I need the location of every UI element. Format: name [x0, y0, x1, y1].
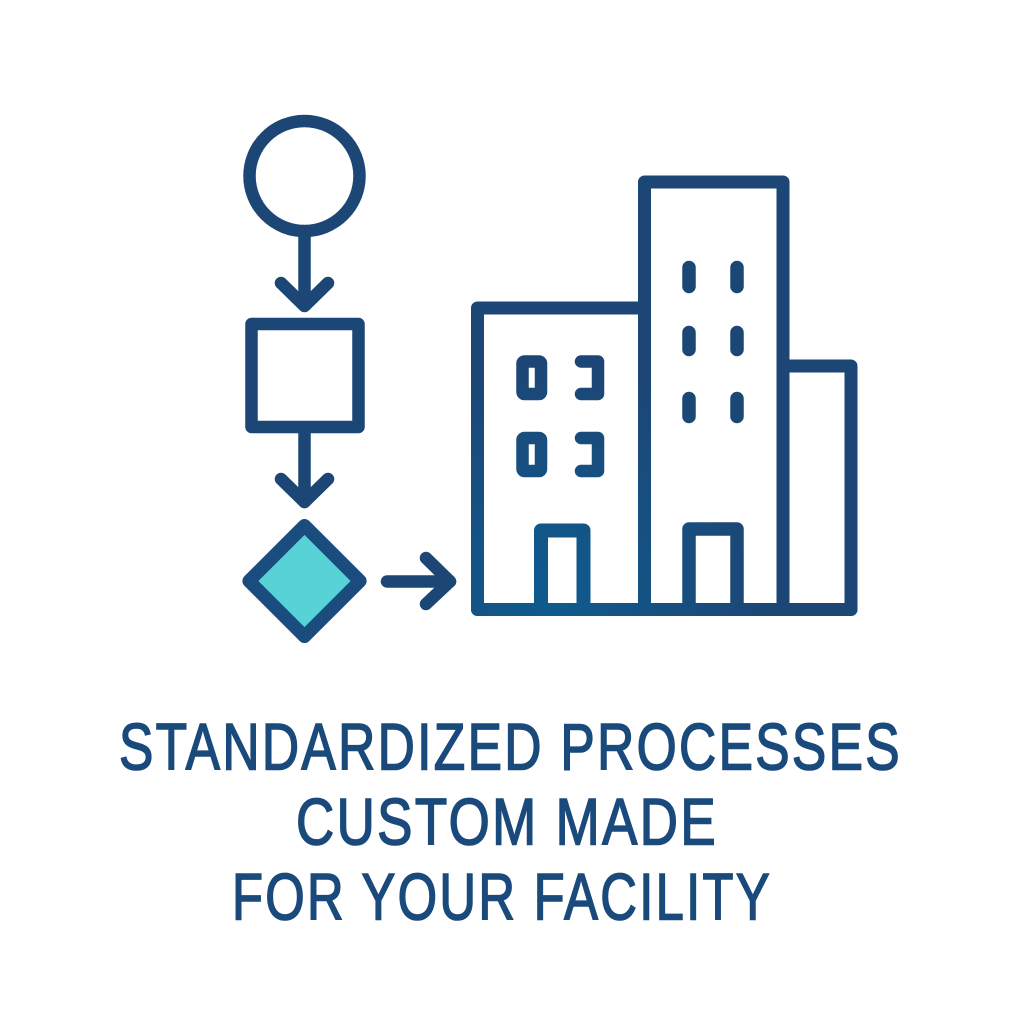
- icon: buildings: [478, 182, 851, 610]
- right building: [783, 366, 851, 610]
- left door: [541, 530, 584, 607]
- arrow: square to diamond: [281, 430, 328, 502]
- icon: start circle: [250, 121, 360, 231]
- icon: decision diamond: [249, 526, 360, 636]
- tall tower: [644, 182, 783, 610]
- icon: process square: [252, 324, 358, 427]
- tower windows: [689, 268, 737, 416]
- arrow: diamond to building: [387, 558, 450, 604]
- left building: [478, 308, 644, 610]
- left building windows: [522, 362, 598, 471]
- line 3: FOR YOUR FACILITY: [232, 860, 772, 934]
- title text: [119, 710, 902, 934]
- arrow: circle to square: [281, 234, 328, 306]
- flowchart: [249, 121, 450, 636]
- tower door: [689, 529, 737, 607]
- ground line: [478, 603, 851, 616]
- line 2: CUSTOM MADE: [296, 784, 718, 858]
